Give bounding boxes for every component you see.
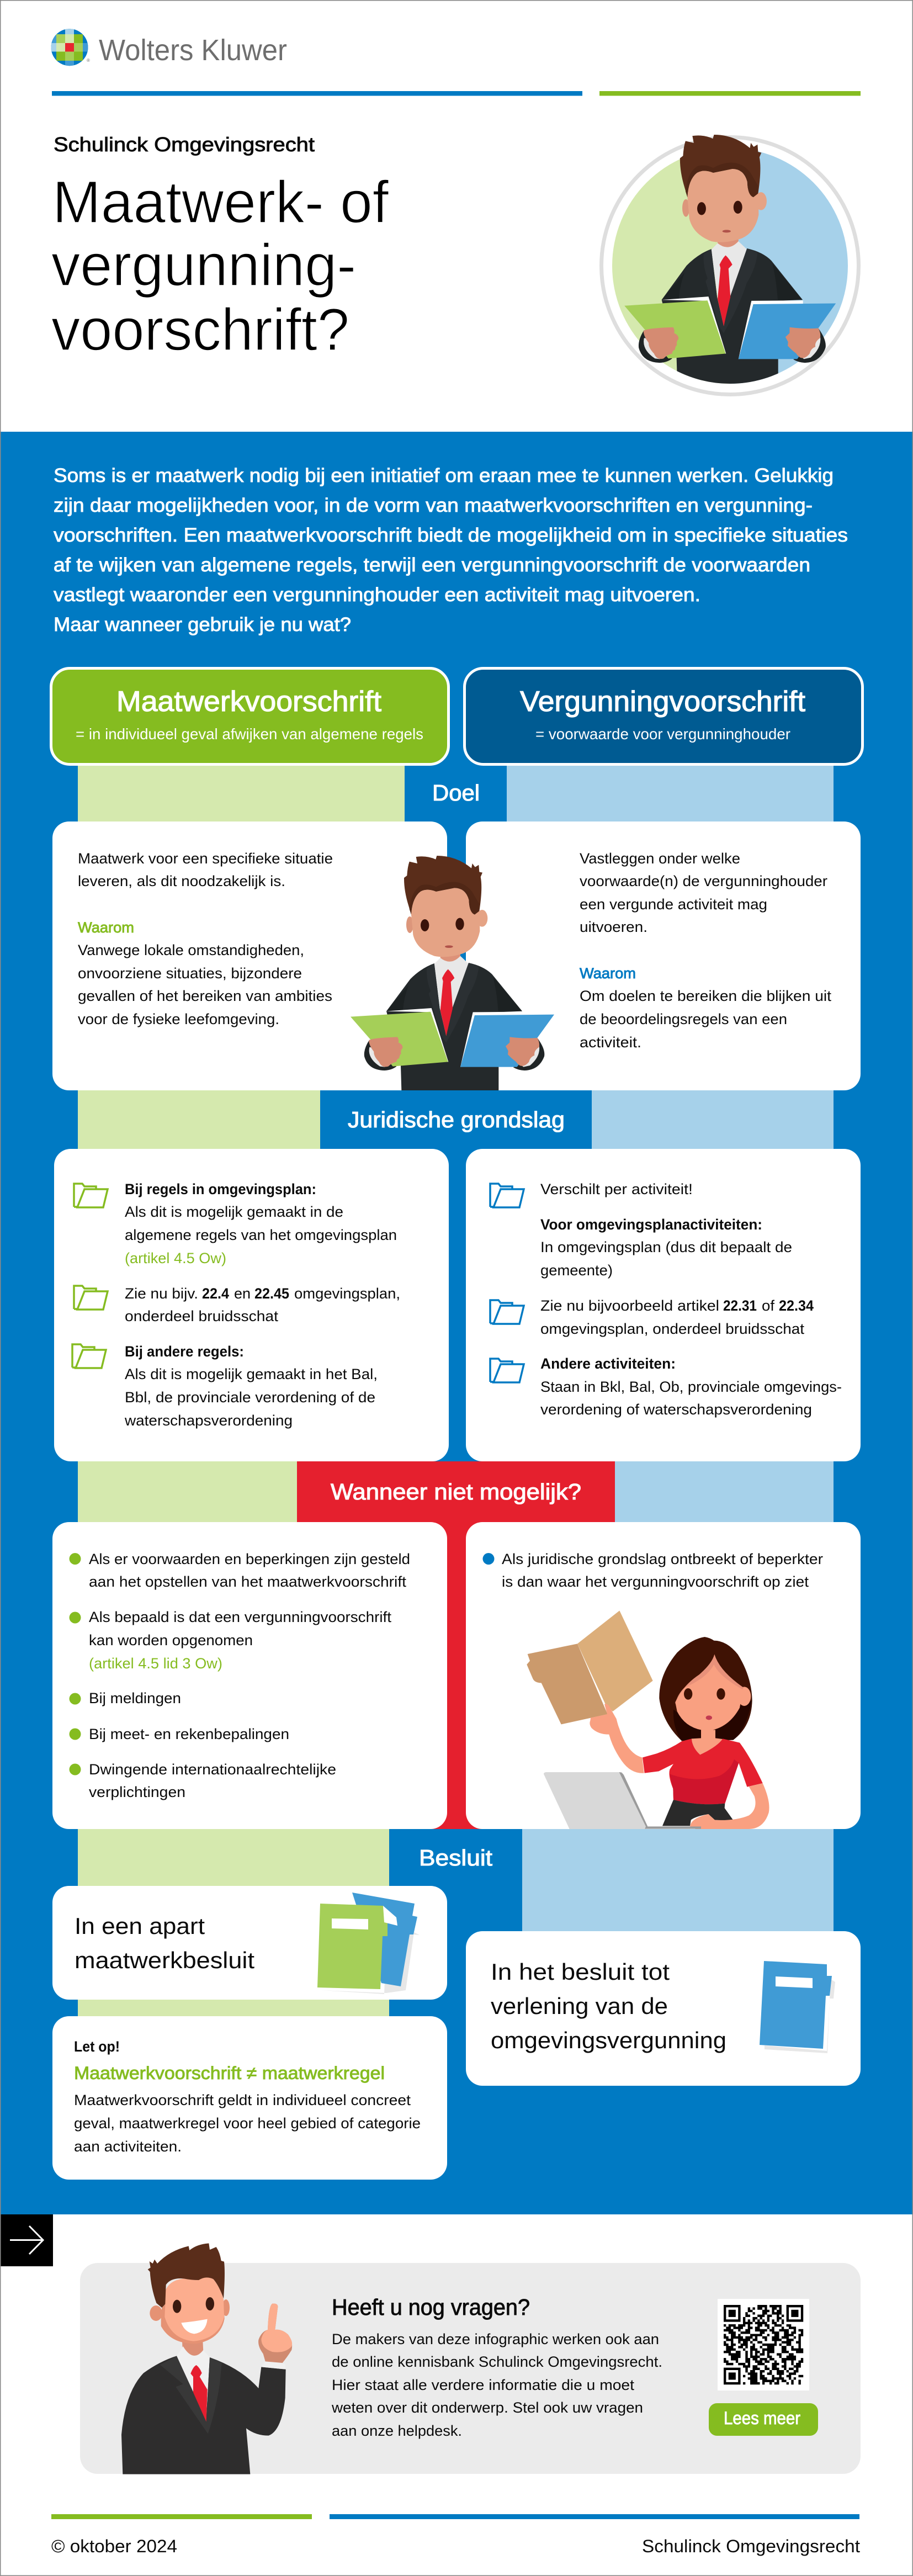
title: vergunning-: [51, 231, 356, 298]
footer brand: Schulinck Omgevingsrecht: [642, 2536, 860, 2556]
footer rule: blue: [330, 2514, 859, 2519]
section band: Juridische grondslag: [78, 1090, 834, 1201]
panel: Doel vergunning: Om doelen te bereiken die blijken uit: [580, 988, 832, 1004]
contact text: aan onze helpdesk.: [332, 2423, 462, 2439]
panel: besluit omgevingsvergunning: verlening van de: [491, 1993, 668, 2019]
contact text: [331, 2331, 662, 2439]
illustration: man with two folders in circle: [602, 135, 859, 394]
contact heading: Heeft u nog vragen?: [332, 2294, 530, 2320]
panel: juridische grondslag maatwerk: en: [234, 1285, 251, 1302]
panel: niet mogelijk maatwerk: Als bepaald is dat een vergunningvoorschrift: [89, 1609, 392, 1625]
subtitle: Schulinck Omgevingsrecht: [54, 133, 315, 156]
contact text: De makers van deze infographic werken ook aan: [332, 2331, 659, 2347]
icon: blue folder: [490, 1359, 524, 1382]
logo globe: [51, 29, 88, 66]
section band: Wanneer niet mogelijk: [78, 1461, 834, 1829]
column header: Vergunningvoorschrift: [465, 668, 862, 764]
section band: Besluit: [78, 1829, 834, 2022]
panel: niet mogelijk maatwerk: verplichtingen: [89, 1784, 185, 1800]
section band: Doel: Doel: [432, 780, 480, 805]
panel: Doel vergunning: een vergunde activiteit mag: [580, 896, 767, 913]
header: logo: ®: [87, 58, 90, 63]
illustration: man pointing up: [121, 2243, 292, 2474]
panel: juridische grondslag vergunning: verordening of waterschapsverordening: [540, 1401, 812, 1418]
panel: Doel maatwerk: [52, 821, 447, 1090]
illustration: woman with folder and laptop: [527, 1610, 769, 1829]
title: voorschrift?: [51, 296, 349, 363]
icon: green folder: [72, 1344, 106, 1368]
panel: niet mogelijk maatwerk: kan worden opgenomen: [89, 1632, 253, 1649]
title: Maatwerk- of: [52, 168, 389, 235]
panel: juridische grondslag maatwerk: Zie nu bijv.: [125, 1285, 198, 1302]
panel: let op: Maatwerkvoorschrift geldt in individueel concreet: [74, 2092, 411, 2108]
panel: Doel maatwerk: leveren, als dit noodzakelijk is.: [78, 873, 285, 889]
column header: Maatwerkvoorschrift: = in individueel geval afwijken van algemene regels: [76, 725, 423, 743]
icon: blue folder: [760, 1961, 835, 2053]
contact text: weten over dit onderwerp. Stel ook uw vragen: [331, 2399, 643, 2416]
title: [51, 168, 389, 363]
button: Lees meer: [709, 2403, 818, 2436]
panel: juridische grondslag vergunning: Andere activiteiten:: [540, 1355, 676, 1372]
icon: green folder: [74, 1286, 108, 1310]
header: logo: [51, 29, 287, 67]
panel: Doel vergunning: uitvoeren.: [580, 919, 647, 935]
footer date: © oktober 2024: [51, 2536, 177, 2556]
panel: juridische grondslag vergunning: Verschilt per activiteit!: [540, 1181, 693, 1197]
panel: juridische grondslag maatwerk: (artikel 4.5 Ow): [125, 1250, 226, 1266]
panel: niet mogelijk vergunning: Als juridische grondslag ontbreekt of beperkter: [502, 1551, 823, 1567]
intro text: vastlegt waaronder een vergunninghouder een activiteit mag uitvoeren.: [54, 584, 700, 606]
panel: juridische grondslag vergunning: Staan in Bkl, Bal, Ob, provinciale omgevings-: [540, 1379, 842, 1395]
section band: Doel: [78, 766, 834, 876]
panel: juridische grondslag vergunning: gemeente): [540, 1262, 613, 1279]
panel: let op: Let op!: [74, 2038, 120, 2055]
panel: Doel maatwerk: gevallen of het bereiken van ambities: [78, 988, 332, 1004]
panel: Doel vergunning: voorwaarde(n) de vergunninghouder: [580, 873, 827, 889]
panel: Doel vergunning: [466, 821, 861, 1090]
panel: besluit omgevingsvergunning: [466, 1931, 861, 2086]
panel: juridische grondslag maatwerk: [54, 1149, 449, 1461]
panel: Doel vergunning: de beoordelingsregels van een: [580, 1011, 787, 1027]
button: Lees meer: Lees meer: [724, 2408, 800, 2428]
panel: juridische grondslag maatwerk: Als dit is mogelijk gemaakt in het Bal,: [125, 1366, 378, 1382]
section band: Juridische grondslag: Juridische grondslag: [348, 1107, 565, 1132]
panel: juridische grondslag maatwerk: Bbl, de provinciale verordening of de: [125, 1389, 375, 1406]
column header: Vergunningvoorschrift: Vergunningvoorschrift: [520, 686, 806, 718]
panel: juridische grondslag vergunning: 22.31: [723, 1297, 757, 1314]
footer rule: green: [51, 2514, 312, 2519]
panel: besluit omgevingsvergunning: omgevingsvergunning: [491, 2027, 726, 2053]
panel: niet mogelijk vergunning: is dan waar het vergunningvoorschrift op ziet: [502, 1573, 809, 1590]
panel: juridische grondslag vergunning: omgevingsplan, onderdeel bruidsschat: [540, 1321, 805, 1337]
panel: juridische grondslag vergunning: Zie nu bijvoorbeeld artikel: [540, 1297, 719, 1314]
panel: juridische grondslag maatwerk: Bij andere regels:: [125, 1343, 244, 1360]
panel: juridische grondslag vergunning: [466, 1149, 861, 1461]
intro text: Soms is er maatwerk nodig bij een initiatief om eraan mee te kunnen werken. Gelukkig: [54, 465, 834, 486]
arrow tab: [0, 2214, 53, 2266]
logo wordmark: Wolters Kluwer: [99, 34, 287, 67]
panel: juridische grondslag maatwerk: Als dit is mogelijk gemaakt in de: [125, 1204, 343, 1220]
intro text: zijn daar mogelijkheden voor, in de vorm van maatwerkvoorschriften en vergunning-: [54, 495, 813, 516]
panel: niet mogelijk maatwerk: Dwingende internationaalrechtelijke: [89, 1761, 336, 1778]
bullets: [70, 1553, 81, 1775]
contact text: de online kennisbank Schulinck Omgevingsrecht.: [332, 2354, 662, 2370]
panel: Doel vergunning: Waarom: [580, 965, 636, 982]
intro text: Maar wanneer gebruik je nu wat?: [54, 614, 351, 635]
panel: juridische grondslag maatwerk: 22.45: [254, 1285, 289, 1302]
panel: niet mogelijk maatwerk: Bij meet- en rekenbepalingen: [89, 1726, 289, 1742]
panel: Doel maatwerk: voor de fysieke leefomgeving.: [78, 1011, 279, 1027]
blue main section: [0, 432, 913, 2214]
panel: Doel maatwerk: onvoorziene situaties, bijzondere: [78, 965, 302, 982]
intro text: [54, 465, 848, 635]
panel: apart maatwerkbesluit: [52, 1886, 447, 2000]
panel: juridische grondslag maatwerk: onderdeel bruidsschat: [125, 1308, 279, 1324]
column header: Maatwerkvoorschrift: Maatwerkvoorschrift: [116, 686, 382, 718]
panel: juridische grondslag vergunning: Voor omgevingsplanactiviteiten:: [540, 1216, 762, 1233]
header rule: blue: [52, 91, 582, 96]
header rule: green: [599, 91, 861, 96]
panel: juridische grondslag vergunning: of: [762, 1297, 774, 1314]
panel: niet mogelijk maatwerk: aan het opstellen van het maatwerkvoorschrift: [89, 1573, 407, 1590]
bullet: [482, 1553, 495, 1565]
icon: green and blue folders: [317, 1893, 420, 1994]
column header: Maatwerkvoorschrift: [51, 668, 448, 764]
panel: Doel vergunning: activiteit.: [580, 1034, 641, 1051]
panel: besluit omgevingsvergunning: In het besluit tot: [491, 1959, 670, 1985]
illustration: man with folders: [351, 856, 554, 1090]
intro text: voorschriften. Een maatwerkvoorschrift biedt de mogelijkheid om in specifieke situaties: [54, 524, 848, 546]
panel: apart maatwerkbesluit: In een apart: [75, 1913, 205, 1939]
icon: blue folder: [490, 1300, 524, 1324]
panel: apart maatwerkbesluit: maatwerkbesluit: [75, 1947, 254, 1973]
panel: juridische grondslag maatwerk: Bij regels in omgevingsplan:: [125, 1181, 316, 1197]
panel: niet mogelijk vergunning: [466, 1522, 861, 1829]
section band: Wanneer niet mogelijk: Wanneer niet mogelijk?: [331, 1479, 581, 1504]
QR code: [718, 2299, 809, 2391]
panel: juridische grondslag maatwerk: waterschapsverordening: [124, 1412, 293, 1429]
intro text: af te wijken van algemene regels, terwijl een vergunningvoorschrift de voorwaarden: [54, 554, 810, 576]
section band: Besluit: Besluit: [419, 1845, 493, 1870]
panel: juridische grondslag vergunning: 22.34: [779, 1297, 814, 1314]
panel: niet mogelijk maatwerk: (artikel 4.5 lid 3 Ow): [89, 1655, 222, 1672]
panel: juridische grondslag maatwerk: 22.4: [202, 1285, 229, 1302]
panel: let op: geval, maatwerkregel voor heel gebied of categorie: [74, 2115, 421, 2132]
panel: Doel maatwerk: Maatwerk voor een specifieke situatie: [78, 850, 333, 867]
panel: let op: [52, 2016, 447, 2180]
panel: Doel vergunning: Vastleggen onder welke: [580, 850, 740, 867]
panel: niet mogelijk maatwerk: [52, 1522, 447, 1829]
panel: juridische grondslag maatwerk: omgevingsplan,: [294, 1285, 400, 1302]
panel: juridische grondslag maatwerk: algemene regels van het omgevingsplan: [125, 1227, 397, 1243]
icon: green folder: [74, 1184, 108, 1207]
contact panel: [80, 2243, 861, 2474]
panel: juridische grondslag vergunning: In omgevingsplan (dus dit bepaalt de: [540, 1239, 792, 1255]
icon: blue folder: [490, 1184, 524, 1207]
panel: Doel maatwerk: Waarom: [78, 919, 134, 936]
panel: let op: Maatwerkvoorschrift ≠ maatwerkregel: [74, 2063, 385, 2083]
panel: niet mogelijk maatwerk: Bij meldingen: [89, 1690, 181, 1706]
panel: Doel maatwerk: Vanwege lokale omstandigheden,: [78, 942, 304, 958]
panel: niet mogelijk maatwerk: Als er voorwaarden en beperkingen zijn gesteld: [89, 1551, 410, 1567]
panel: let op: aan activiteiten.: [74, 2138, 182, 2155]
contact text: Hier staat alle verdere informatie die u moet: [332, 2377, 635, 2393]
column header: Vergunningvoorschrift: = voorwaarde voor vergunninghouder: [535, 725, 790, 743]
